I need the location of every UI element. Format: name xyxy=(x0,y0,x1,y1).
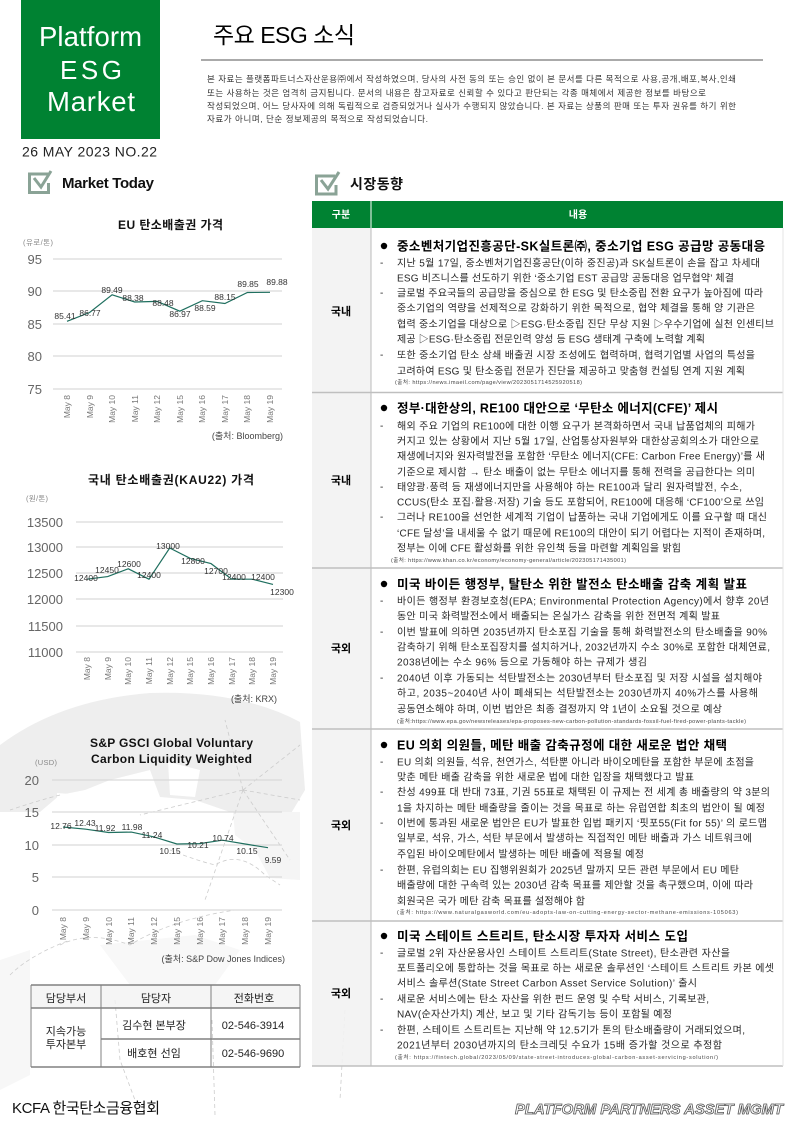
news body: 하고, 2035~2040년 사이 폐쇄되는 석탄발전소는 2030년까지 40%가스를 사용해 xyxy=(397,686,758,700)
news body: 배출량에 대한 구속력 있는 2030년 감축 목표를 제안할 것을 촉구했으며, 이에 따라 xyxy=(397,878,753,892)
icon: checkbox xyxy=(316,172,339,194)
x axis labels xyxy=(58,917,273,945)
x axis labels: May 16 xyxy=(206,657,216,685)
news body: - xyxy=(380,757,383,768)
x axis labels: May 15 xyxy=(175,395,185,423)
data labels: 86.97 xyxy=(169,309,191,319)
bullet xyxy=(381,405,387,411)
y axis labels xyxy=(27,515,63,660)
y axis labels: 75 xyxy=(28,382,42,397)
contact table: 02-546-9690 xyxy=(222,1048,284,1060)
data labels: 12700 xyxy=(204,566,228,576)
news body: 1을 차지하는 메탄 배출량을 줄이는 것을 목표로 하는 유럽연합 최초의 법안이 될 예정 xyxy=(397,802,765,814)
table row backgrounds xyxy=(312,228,783,1066)
news item 1 xyxy=(380,238,774,386)
line series xyxy=(67,292,270,321)
data labels: 88.48 xyxy=(152,298,174,308)
news body: 제공 ▷ESG·탄소중립 전문인력 양성 등 ESG 생태계 구축에 노력할 계획 xyxy=(397,332,705,346)
news body: 한편, 유럽의회는 EU 집행위원회가 2025년 말까지 모든 관련 부문에서 EU 메탄 xyxy=(397,864,739,876)
news body: 일부로, 석유, 가스, 석탄 부문에서 발생하는 직접적인 메탄 배출과 가스 네트워크에 xyxy=(397,832,752,844)
x axis labels xyxy=(62,395,275,423)
data labels: 9.59 xyxy=(265,855,282,865)
y axis labels xyxy=(25,773,39,918)
contact table: 전화번호 xyxy=(234,992,274,1005)
news body: 2038년에는 수소 96% 등으로 가동해야 하는 규제가 생김 xyxy=(397,656,647,668)
y axis labels: 10 xyxy=(25,838,39,853)
x axis labels: May 15 xyxy=(185,657,195,685)
data labels: 88.59 xyxy=(194,303,216,313)
chart title: 국내 탄소배출권(KAU22) 가격 xyxy=(88,472,254,487)
y axis labels: 95 xyxy=(28,252,42,267)
unit: (USD) xyxy=(35,758,58,767)
chart title: S&P GSCI Global Voluntary xyxy=(90,736,253,750)
x axis labels: May 16 xyxy=(197,395,207,423)
chart title: EU 탄소배출권 가격 xyxy=(118,217,223,232)
x axis labels: May 8 xyxy=(62,395,72,418)
data labels: 88.15 xyxy=(214,292,236,302)
news body: 지난 5월 17일, 중소벤처기업진흥공단(이하 중진공)과 SK실트론이 손을 잡고 차세대 xyxy=(397,256,760,270)
news body: 또한 중소기업 탄소 상쇄 배출권 시장 조성에도 협력하며, 협력기업별 사업의 특성을 xyxy=(397,348,755,362)
x axis labels: May 10 xyxy=(104,917,114,945)
news body: 동안 미국 화력발전소에서 배출되는 온실가스 감축을 위한 전면적 계획 발표 xyxy=(397,610,720,622)
data labels: 11.98 xyxy=(122,822,143,832)
x axis labels: May 18 xyxy=(240,917,250,945)
masthead: Platform ESG Market: E S G xyxy=(60,55,122,85)
news body: 회원국은 국가 메탄 감축 목표를 설정해야 함 xyxy=(397,894,585,908)
data labels: 10.15 xyxy=(159,846,181,856)
x axis labels: May 12 xyxy=(149,917,159,945)
icon: checkbox xyxy=(30,171,51,192)
heading: 시장동향: 시장동향 xyxy=(350,176,403,192)
row label: 국외 xyxy=(331,987,351,1000)
disclaimer text: 본 자료는 플랫폼파트너스자산운용㈜에서 작성하였으며, 당사의 사전 동의 또는 승인 없이 본 문서를 다른 목적으로 사용,공개,배포,복사,인쇄 xyxy=(207,74,736,84)
chart title xyxy=(90,736,253,766)
chart: KAU22 price xyxy=(26,472,294,704)
news body: ‘CFE 달성’을 내세울 수 없기 때문에 RE100의 대안이 되기 어렵다는 지적이 존재하며, xyxy=(397,526,765,540)
news body xyxy=(380,756,770,908)
news source: (출처: https://www.khan.co.kr/economy/economy-general/article/202305171435001) xyxy=(391,556,626,564)
chart title: Carbon Liquidity Weighted xyxy=(91,752,252,766)
y axis labels: 11000 xyxy=(28,645,63,660)
contact table: 담당부서 xyxy=(46,992,86,1005)
news source: (출처: https://www.naturalgasworld.com/eu-adopts-law-on-cutting-energy-sector-methane-emissions-105063) xyxy=(397,908,738,916)
data labels: 12.76 xyxy=(50,821,72,831)
disclaimer text: 작성되었으며, 어느 당사자에 의해 독립적으로 검증되었거나 실사가 수행되지 않았습니다. 본 자료는 상품의 판매 또는 투자 권유를 하기 위한 xyxy=(207,101,736,111)
news body xyxy=(380,420,767,554)
issue date: 26 MAY 2023 NO.22 xyxy=(22,144,157,160)
news body: 글로벌 2위 자산운용사인 스테이트 스트리트(State Street), 탄소관련 자산을 xyxy=(397,946,730,960)
y axis labels xyxy=(28,252,42,397)
y axis labels: 11500 xyxy=(28,619,63,634)
news body xyxy=(380,946,774,1052)
contact table xyxy=(31,985,300,1067)
news body: CCUS(탄소 포집·활용·저장) 기술 등도 포함되어, RE100에 대응해 ‘CF100’으로 쓰임 xyxy=(397,496,764,508)
contact table: 담당자 xyxy=(141,992,171,1005)
data labels: 12800 xyxy=(181,556,205,566)
bullet xyxy=(381,742,387,748)
news item 5 xyxy=(380,930,774,1061)
y axis labels: 85 xyxy=(28,317,42,332)
data labels: 11.24 xyxy=(142,830,163,840)
x axis labels: May 19 xyxy=(265,395,275,423)
news body: 커지고 있는 상황에서 지난 5월 17일, 산업통상자원부와 대한상공회의소가 대안으로 xyxy=(397,434,759,448)
footer: KCFA: KCFA 한국탄소금융협회 xyxy=(12,1100,160,1117)
data labels: 11.92 xyxy=(95,823,116,833)
disclaimer text xyxy=(207,74,736,124)
news body: - xyxy=(380,627,383,638)
x axis labels: May 8 xyxy=(58,917,68,940)
x axis labels: May 9 xyxy=(85,395,95,418)
y axis labels: 90 xyxy=(28,284,42,299)
news body: 서비스 솔루션(State Street Carbon Asset Service Solution)’ 출시 xyxy=(397,978,697,990)
line series xyxy=(63,827,268,848)
news body: - xyxy=(380,512,383,523)
unit: (원/톤) xyxy=(26,494,48,503)
news body: - xyxy=(380,350,383,361)
news body: 그러나 RE100을 선언한 세계적 기업이 납품하는 국내 기업에게도 이를 요구할 때 대신 xyxy=(397,510,767,524)
x axis labels: May 17 xyxy=(220,395,230,423)
background world map xyxy=(0,693,345,1115)
data labels: 12400 xyxy=(222,572,246,582)
data labels: 85.41 xyxy=(54,311,76,321)
news body: 포트폴리오에 통합하는 것을 목표로 하는 새로운 솔루션인 ‘스테이트 스트리트 카본 에셋 xyxy=(397,962,774,974)
x axis labels: May 19 xyxy=(268,657,278,685)
y axis labels: 5 xyxy=(32,870,39,885)
x axis labels: May 12 xyxy=(152,395,162,423)
x axis labels: May 16 xyxy=(195,917,205,945)
news body: 2040년 이후 가동되는 석탄발전소는 2030년부터 탄소포집 및 저장 시설을 설치해야 xyxy=(397,672,762,684)
heading: Market Today xyxy=(30,171,155,192)
x axis labels: May 12 xyxy=(165,657,175,685)
y axis labels: 12500 xyxy=(27,566,63,581)
news body xyxy=(380,594,770,716)
news body: 주입된 바이오메탄에서 발생하는 메탄 배출에 적용될 예정 xyxy=(397,848,644,860)
news body: NAV(순자산가치) 계산, 보고 및 기타 감독기능 등이 포함될 예정 xyxy=(397,1008,672,1020)
footer logo: Platform Partners Asset Mgmt: PLATFORM PARTNERS ASSET MGMT xyxy=(515,1101,785,1118)
heading: Market Today: Market Today xyxy=(62,175,155,192)
news body: - xyxy=(380,787,383,798)
news item 4 xyxy=(380,738,770,916)
news body: 찬성 499표 대 반대 73표, 기권 55표로 채택된 이 규제는 전 세계 총 배출량의 약 3분의 xyxy=(397,786,770,798)
x axis labels: May 8 xyxy=(82,657,92,680)
data labels: 10.74 xyxy=(212,833,234,843)
data labels: 12450 xyxy=(95,565,119,575)
chart: S&P GSCI voluntary carbon xyxy=(25,736,285,964)
news heading: 정부·대한상의, RE100 대안으로 ‘무탄소 에너지(CFE)’ 제시 xyxy=(397,400,718,416)
table header xyxy=(312,201,783,228)
news body: 해외 주요 기업의 RE100에 대한 이행 요구가 본격화하면서 국내 납품업체의 피해가 xyxy=(397,420,755,432)
row label: 국외 xyxy=(331,642,351,655)
y axis labels: 13500 xyxy=(27,515,63,530)
x axis labels: May 11 xyxy=(144,657,154,684)
bullet xyxy=(381,933,387,939)
news body: 감축하기 위해 탄소포집장치를 설치하거나, 2032년까지 수소 30%로 포함한 대체연료, xyxy=(397,640,770,654)
contact table: 지속가능 xyxy=(46,1025,86,1038)
news item 3 xyxy=(380,576,770,725)
news body: - xyxy=(380,288,383,299)
data labels: 88.38 xyxy=(122,293,144,303)
masthead: Platform ESG Market: Market xyxy=(47,86,135,117)
table header: 구분 xyxy=(332,209,350,221)
data labels: 10.15 xyxy=(236,846,258,856)
masthead: Platform ESG Market xyxy=(21,0,160,139)
news body xyxy=(380,256,774,378)
line series xyxy=(87,548,273,584)
row label: 국내 xyxy=(331,473,351,487)
news body: 2021년부터 2030년까지의 탄소크레딧 수요가 15배 증가할 것으로 추정함 xyxy=(397,1040,722,1052)
news body: - xyxy=(380,258,383,269)
news body: - xyxy=(380,482,383,493)
data labels xyxy=(50,818,282,865)
contact table: 투자본부 xyxy=(46,1038,86,1051)
x axis labels: May 9 xyxy=(103,657,113,680)
x axis labels: May 18 xyxy=(242,395,252,423)
news source: (출처: https://news.imaeil.com/page/view/2023051714525920518) xyxy=(395,378,582,386)
x axis labels: May 17 xyxy=(217,917,227,945)
news body: - xyxy=(380,596,383,607)
news body: 바이든 행정부 환경보호청(EPA; Environmental Protection Agency)에서 향후 20년 xyxy=(397,594,769,608)
data labels: 89.88 xyxy=(266,277,288,287)
x axis labels: May 10 xyxy=(123,657,133,685)
data labels xyxy=(54,277,288,321)
x axis labels: May 17 xyxy=(227,657,237,685)
contact table: 02-546-3914 xyxy=(222,1020,284,1032)
y axis labels: 0 xyxy=(32,903,39,918)
data labels: 89.85 xyxy=(237,279,259,289)
y axis labels: 20 xyxy=(25,773,39,788)
data labels: 12600 xyxy=(117,559,141,569)
data labels xyxy=(74,541,294,597)
disclaimer text: 자료가 아니며, 단순 정보제공의 목적으로 작성되었습니다. xyxy=(207,114,428,124)
masthead: Platform ESG Market: Platform xyxy=(39,21,142,52)
x axis labels: May 10 xyxy=(107,395,117,423)
contact table: 김수현 본부장 xyxy=(122,1019,186,1032)
x axis labels: May 9 xyxy=(81,917,91,940)
x axis labels: May 15 xyxy=(172,917,182,945)
news body: - xyxy=(380,994,383,1005)
news body: 맞춘 메탄 배출 감축을 위한 새로운 법에 대한 입장을 채택했다고 발표 xyxy=(397,770,694,784)
news body: 고려하여 ESG 및 탄소중립 전문가 진단을 제공하고 맞춤형 컨설팅 연계 지원 계획 xyxy=(397,364,745,378)
news body: - xyxy=(380,1025,383,1036)
news body: 기준으로 제시함 → 탄소 배출이 없는 무탄소 에너지를 통해 전력을 공급한다는 의미 xyxy=(397,466,755,478)
news body: - xyxy=(380,673,383,684)
data labels: 12400 xyxy=(74,573,98,583)
x axis labels: May 19 xyxy=(263,917,273,945)
data labels: 12400 xyxy=(251,572,275,582)
news body: 재생에너지와 원자력발전을 포함한 ‘무탄소 에너지(CFE: Carbon Free Energy)’를 새 xyxy=(397,450,765,462)
news body: 공동연소해야 하며, 이번 법안은 최종 결정까지 약 1년이 소요될 것으로 예상 xyxy=(397,702,722,716)
news heading: EU 의회 의원들, 메탄 배출 감축규정에 대한 새로운 법안 채택 xyxy=(397,738,727,752)
news body: EU 의회 의원들, 석유, 천연가스, 석탄뿐 아니라 바이오메탄을 포함한 부문에 초점을 xyxy=(397,756,754,768)
news body: 새로운 서비스에는 탄소 자산을 위한 펀드 운영 및 수탁 서비스, 기록보관, xyxy=(397,992,709,1006)
source: (출처: S&P Dow Jones Indices) xyxy=(162,953,285,964)
data labels: 89.49 xyxy=(101,285,123,295)
news body: - xyxy=(380,421,383,432)
news heading: 미국 스테이트 스트리트, 탄소시장 투자자 서비스 도입 xyxy=(397,930,688,944)
x axis labels: May 11 xyxy=(130,395,140,422)
news body: - xyxy=(380,948,383,959)
news body: 중소기업의 역량을 선제적으로 강화하기 위한 목적으로, 협약 체결을 통해 양 기관은 xyxy=(397,302,755,314)
data labels: 12.43 xyxy=(74,818,96,828)
news body: 한편, 스테이트 스트리트는 지난해 약 12.5기가 톤의 탄소배출량이 거래되었으며, xyxy=(397,1024,745,1036)
data labels: 13000 xyxy=(156,541,180,551)
y axis labels: 13000 xyxy=(27,540,63,555)
data labels: 12400 xyxy=(137,570,161,580)
unit: (유로/톤) xyxy=(23,238,54,247)
heading: 시장동향 xyxy=(316,172,403,194)
x axis labels xyxy=(82,657,278,685)
news body: - xyxy=(380,865,383,876)
table header: 내용 xyxy=(569,208,587,221)
news source: (출처:https://www.epa.gov/newsreleases/epa-proposes-new-carbon-pollution-standards-fossil-fuel-fired-power-plants-tackle) xyxy=(397,717,746,725)
source: (출처: Bloomberg) xyxy=(212,430,283,441)
news item 2 xyxy=(380,400,767,564)
row label: 국내 xyxy=(331,304,351,318)
data labels: 12300 xyxy=(270,587,294,597)
news body: - xyxy=(380,818,383,829)
disclaimer text: 또는 사용하는 것은 엄격히 금지됩니다. 문서의 내용은 참고자료로 신뢰할 수 있다고 판단되는 각종 매체에서 제공한 정보를 바탕으로 xyxy=(207,88,706,98)
data labels: 10.21 xyxy=(187,840,209,850)
contact table: 배호현 선임 xyxy=(127,1047,181,1060)
chart: EU carbon price xyxy=(23,217,288,441)
news heading: 중소벤처기업진흥공단-SK실트론㈜, 중소기업 ESG 공급망 공동대응 xyxy=(397,238,765,254)
y axis labels: 15 xyxy=(25,805,39,820)
news body: ESG 비즈니스를 선도하기 위한 ‘중소기업 EST 공급망 공동대응 업무협약’ 체결 xyxy=(397,272,734,284)
news body: 글로벌 주요국들의 공급망을 중심으로 한 ESG 및 탄소중립 전환 요구가 높아짐에 따라 xyxy=(397,286,763,300)
news body: 협력 중소기업을 대상으로 ▷ESG·탄소중립 진단 무상 지원 ▷우수기업에 실천 인센티브 xyxy=(397,318,774,330)
news body: 정부는 이에 CFE 활성화를 위한 유인책 등을 마련할 계획임을 밝힘 xyxy=(397,542,681,554)
data labels: 86.77 xyxy=(79,308,101,318)
source: (출처: KRX) xyxy=(231,693,277,704)
news source: (출처: https://fintech.global/2023/05/09/state-street-introduces-global-carbon-asset-servicing-solution/) xyxy=(395,1053,718,1061)
y axis labels: 12000 xyxy=(27,592,63,607)
x axis labels: May 18 xyxy=(247,657,257,685)
news body: 태양광·풍력 등 재생에너지만을 사용해야 하는 RE100과 달리 원자력발전, 수소, xyxy=(397,480,742,494)
bullet xyxy=(381,581,387,587)
x axis labels: May 11 xyxy=(126,917,136,944)
title: 주요 ESG 소식 xyxy=(213,22,355,48)
y axis labels: 80 xyxy=(28,349,42,364)
bullet xyxy=(381,243,387,249)
news body: 이번에 통과된 새로운 법안은 EU가 발표한 입법 패키지 ‘핏포55(Fit for 55)’ 의 로드맵 xyxy=(397,816,767,830)
row label: 국외 xyxy=(331,819,351,832)
news heading: 미국 바이든 행정부, 탈탄소 위한 발전소 탄소배출 감축 계획 발표 xyxy=(397,576,747,592)
news body: 이번 발표에 의하면 2035년까지 탄소포집 기술을 통해 화력발전소의 탄소배출을 90% xyxy=(397,626,767,638)
